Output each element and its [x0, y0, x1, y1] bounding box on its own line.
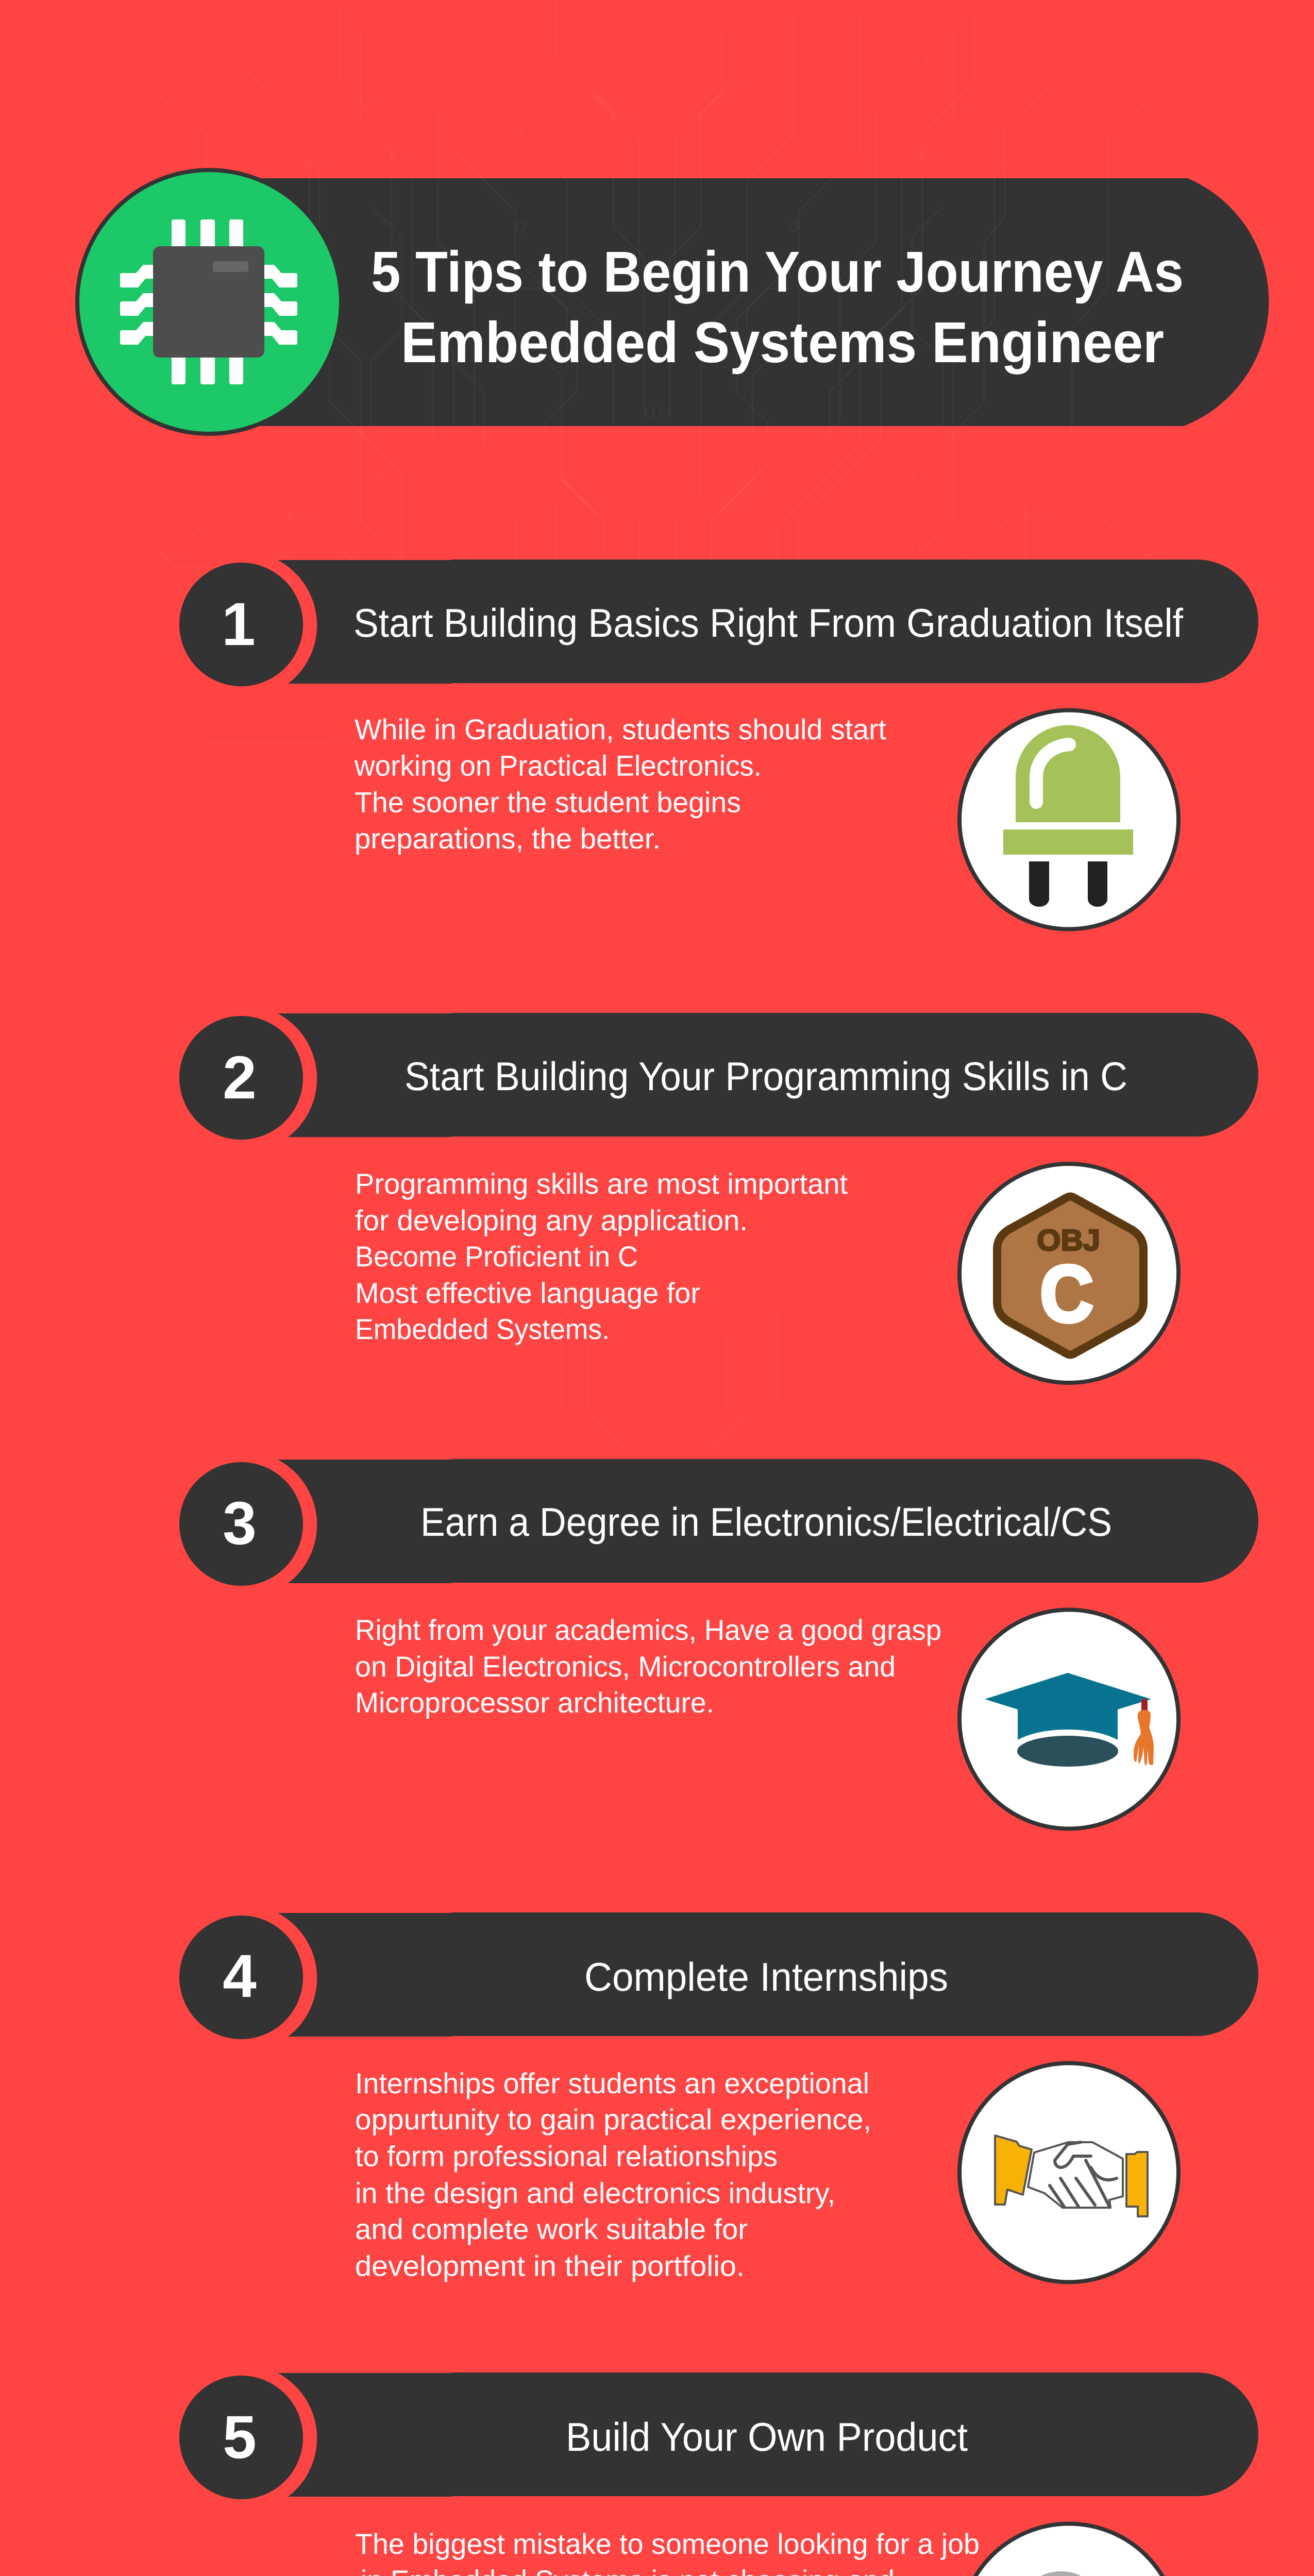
tip 3 number badge: 3 [223, 1489, 257, 1557]
tip 1 number badge: 1 [222, 590, 256, 658]
tip 4 number badge: 4 [223, 1942, 257, 2010]
tip 4 body text: oppurtunity to gain practical experience, [355, 2103, 871, 2136]
tip 4 body text: in the design and electronics industry, [355, 2177, 835, 2209]
tip 5 panel [179, 2372, 1258, 2576]
tip 5 heading: Build Your Own Product [566, 2414, 968, 2460]
tip 5 number badge: 5 [223, 2403, 257, 2471]
tip 4 body text: Internships offer students an exceptional [355, 2067, 869, 2099]
icon: handshake [959, 2063, 1178, 2282]
tip 3 body text [355, 1614, 941, 1719]
icon: Objective-C hexagon [959, 1164, 1178, 1383]
tip 1 body text: The sooner the student begins [355, 786, 741, 818]
title text: 5 Tips to Begin Your Journey As [371, 240, 1184, 304]
tip 2 heading: Start Building Your Programming Skills in C [405, 1054, 1127, 1099]
tip 4 body text: to form professional relationships [355, 2140, 778, 2172]
tip 2 body text: Embedded Systems. [355, 1313, 610, 1345]
tip 2 number badge: 2 [223, 1044, 257, 1112]
tip 1 heading: Start Building Basics Right From Graduation Itself [353, 600, 1183, 646]
tip 2 body text: Become Proficient in C [355, 1240, 638, 1273]
tip 5 number badge [179, 2376, 303, 2499]
tip 1 body text: working on Practical Electronics. [354, 749, 762, 782]
tip 4 body text [355, 2067, 871, 2282]
title text [371, 240, 1184, 375]
icon: Objective-C hexagon: OBJ [1037, 1224, 1100, 1257]
tip 2 number badge [179, 1016, 303, 1140]
tip 3 heading bar [278, 1459, 1258, 1583]
tip 3 heading: Earn a Degree in Electronics/Electrical/CS [420, 1499, 1112, 1545]
tip 2 heading bar [278, 1013, 1258, 1137]
tip 2 body text: Programming skills are most important [355, 1167, 848, 1200]
tip 2 body text [355, 1167, 848, 1345]
tip 3 number badge [179, 1462, 303, 1586]
tip 3 body text: Microprocessor architecture. [355, 1686, 714, 1719]
tip 1 body text: While in Graduation, students should start [355, 713, 886, 745]
tip 3 body text: on Digital Electronics, Microcontrollers and [355, 1650, 896, 1683]
tip 5 body text: The biggest mistake to someone looking for a job [355, 2528, 980, 2560]
tip 2 body text: for developing any application. [355, 1204, 748, 1236]
title icon: microchip in green circle [77, 170, 341, 434]
tip 4 panel [179, 1912, 1258, 2282]
tip 3 body text: Right from your academics, Have a good grasp [355, 1614, 941, 1646]
tip 1 heading bar [278, 560, 1258, 684]
tip 4 body text: development in their portfolio. [355, 2249, 745, 2282]
icon: LED [959, 710, 1178, 929]
tip 3 panel [179, 1459, 1258, 1829]
tip 1 panel [179, 560, 1258, 929]
tip 2 panel [179, 1013, 1258, 1383]
tip 1 body text [354, 713, 886, 855]
icon: isometric phone with app buttons [959, 2523, 1178, 2576]
tip 4 heading: Complete Internships [584, 1954, 948, 1999]
title banner bar [206, 178, 1269, 426]
tip 1 body text: preparations, the better. [355, 822, 661, 855]
tip 4 heading bar [278, 1912, 1258, 2037]
tip 4 body text: and complete work suitable for [355, 2213, 748, 2245]
tip 1 number badge [179, 563, 303, 686]
icon: Objective-C hexagon: C [1040, 1249, 1093, 1339]
icon: graduation cap [959, 1609, 1178, 1829]
title text: Embedded Systems Engineer [401, 310, 1164, 375]
tip 5 body text [355, 2528, 980, 2576]
tip 5 heading bar [278, 2372, 1258, 2497]
tip 4 number badge [179, 1916, 303, 2039]
tip 2 body text: Most effective language for [355, 1277, 700, 1309]
